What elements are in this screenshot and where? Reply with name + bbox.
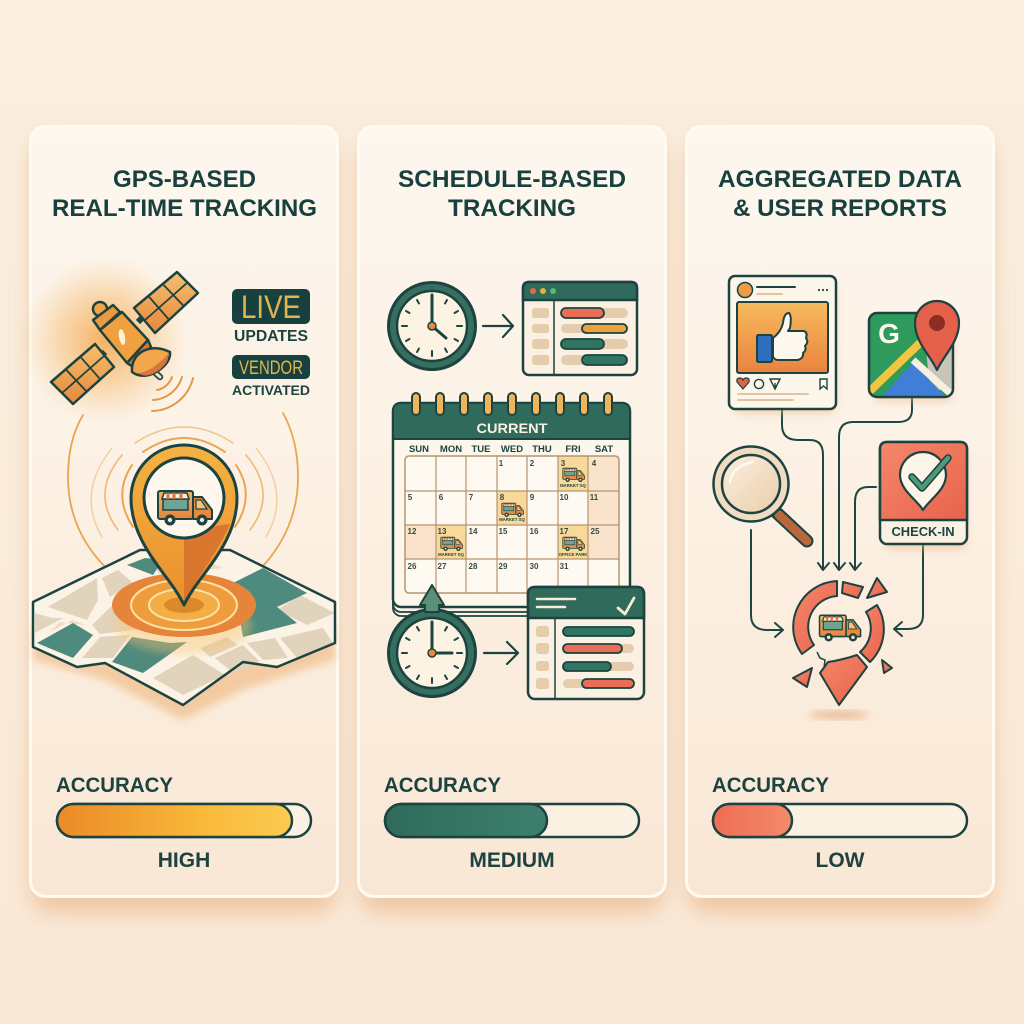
heading: GPS-based [52,166,317,222]
connector lines [751,397,923,637]
accuracy meter: medium: ACCURACY [384,774,501,797]
icon: google maps tile [869,301,959,402]
calendar dates: 27 [438,562,447,571]
icon: thumbs up [757,313,807,362]
badge: live updates: UPDATES [234,328,308,345]
accuracy meter: high: HIGH [158,849,210,872]
social post card [729,276,836,414]
calendar dates: 4 [592,459,597,468]
heading: GPS-based: REAL-TIME TRACKING [52,195,317,222]
location target rings [112,573,256,654]
calendar dates: 5 [408,493,413,502]
scheduled vendor stops: OFFICE PARK [559,552,588,557]
calendar dates: 12 [408,527,417,536]
accuracy meter: medium [384,774,639,872]
calendar dates: 6 [439,493,444,502]
accuracy meter: high: ACCURACY [56,774,173,797]
calendar [393,393,630,616]
calendar dates: 13 [438,527,447,536]
calendar dates: 9 [530,493,535,502]
arrow [484,642,518,664]
calendar dates: 15 [499,527,508,536]
panel: aggregated data and user reports [686,126,994,912]
icon: google maps tile: G [878,318,900,349]
scheduled vendor stops [438,468,588,557]
calendar dates: 26 [408,562,417,571]
weekday labels: FRI [565,444,581,455]
calendar binder rings [412,393,612,415]
scheduled vendor stops: MARKET SQ [560,483,587,488]
calendar dates: 17 [560,527,569,536]
icon: magnifying glass [714,446,807,541]
calendar dates: 28 [469,562,478,571]
weekday labels: TUE [472,444,490,455]
calendar dates: 14 [469,527,478,536]
heading: GPS-based: GPS-BASED [113,166,256,193]
icon: food truck [158,491,212,526]
calendar dates: 16 [530,527,539,536]
calendar dates [408,459,600,571]
weekday labels: SAT [595,444,613,455]
badge: vendor activated: ACTIVATED [232,382,310,398]
scheduled vendor stops: MARKET SQ [499,517,526,522]
schedule window bottom [528,587,644,699]
heading: schedule-based: TRACKING [448,195,576,222]
signal rings around pin [68,413,298,585]
icon: food truck [820,615,861,642]
check-in card [880,442,967,550]
calendar dates: 8 [500,493,505,502]
map [33,550,335,720]
icon: location pin with truck [131,445,237,605]
up arrow from clock to calendar [420,585,444,612]
icon: satellite [20,255,198,425]
heading: schedule-based [398,166,626,222]
post action icons [737,378,827,389]
calendar dates: 29 [499,562,508,571]
heading: aggregated data: AGGREGATED DATA [718,166,962,193]
heading: schedule-based: SCHEDULE-BASED [398,166,626,193]
icon: satellite signal waves [152,377,193,411]
accuracy meter: low [712,774,967,872]
calendar dates: 7 [469,493,474,502]
calendar dates: 3 [561,459,566,468]
heading: aggregated data: & USER REPORTS [733,195,947,222]
weekday labels: SUN [409,444,429,455]
badge: vendor activated [232,355,310,398]
icon: broken location pin with truck [793,578,892,719]
calendar grid [405,456,619,593]
weekday labels: THU [532,444,552,455]
calendar dates: 2 [530,459,535,468]
panel: schedule-based tracking [358,126,666,912]
schedule window top [523,282,637,375]
calendar dates: 10 [560,493,569,502]
calendar: CURRENT [476,420,548,436]
accuracy meter: low: LOW [816,849,865,872]
badge: vendor activated: VENDOR [239,358,303,379]
scheduled vendor stops: MARKET SQ [438,552,465,557]
badge: live updates [232,289,310,345]
calendar dates: 25 [591,527,600,536]
icon: clock 3 o'clock [388,610,476,696]
accuracy meter: medium: MEDIUM [469,849,555,872]
check-in card: CHECK-IN [892,525,954,539]
calendar dates: 31 [560,562,569,571]
panel: GPS-based real-time tracking [20,126,338,912]
accuracy meter: low: ACCURACY [712,774,829,797]
heading: aggregated data [718,166,962,222]
accuracy meter: high [56,774,311,872]
weekday labels: WED [501,444,523,455]
calendar dates: 11 [590,493,599,502]
calendar dates: 1 [499,459,504,468]
weekday labels [409,444,613,455]
weekday labels: MON [440,444,462,455]
icon: clock 4 o'clock [388,282,476,370]
badge: live updates: LIVE [241,289,301,325]
calendar dates: 30 [530,562,539,571]
arrow [483,315,513,337]
